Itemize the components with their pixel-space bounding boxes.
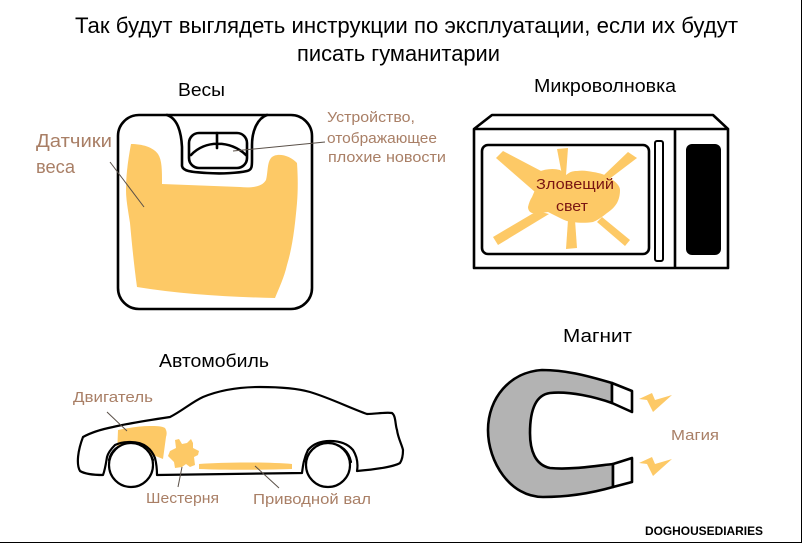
- drive shaft: [199, 462, 292, 470]
- control panel: [686, 144, 721, 255]
- scales body: [118, 115, 312, 309]
- panel: magnet: [488, 326, 719, 497]
- top spark: [639, 393, 672, 412]
- label: weight sensors: веса: [36, 157, 76, 177]
- magnet top pole: [612, 383, 632, 412]
- magnet bottom pole: [613, 458, 632, 487]
- front wheel: [109, 443, 153, 487]
- heading: magnet: Магнит: [563, 326, 632, 346]
- label: sinister light: свет: [556, 199, 588, 215]
- magnet body: [488, 370, 613, 497]
- title: писать гуманитарии: [297, 41, 500, 66]
- bottom spark: [639, 457, 672, 476]
- heading: microwave: Микроволновка: [534, 76, 677, 96]
- label: engine: Двигатель: [73, 389, 153, 406]
- sinister light: [493, 148, 637, 249]
- label: display device: плохие новости: [328, 150, 446, 166]
- microwave body: [474, 115, 728, 268]
- panel: car: [73, 351, 403, 508]
- weight sensors fill: [126, 144, 298, 298]
- title: [75, 13, 738, 66]
- label: sinister light: Зловещий: [536, 177, 614, 193]
- gear: [168, 439, 199, 468]
- label: weight sensors: Датчики: [36, 131, 112, 151]
- heading: scales: Весы: [178, 80, 225, 100]
- heading: car: Автомобиль: [159, 351, 269, 371]
- display: [189, 133, 247, 168]
- leader: weight sensors: [110, 162, 144, 207]
- door handle: [655, 141, 663, 261]
- rear wheel arch: [306, 444, 351, 462]
- label: display device: [327, 110, 446, 166]
- title: Так будут выглядеть инструкции по эксплуатации, если их будут: [75, 13, 738, 38]
- label: drive shaft: Приводной вал: [253, 491, 371, 508]
- display housing: [167, 115, 267, 173]
- rear wheel: [306, 443, 350, 487]
- microwave window: [482, 145, 649, 254]
- panel: scales: [36, 80, 446, 309]
- leaders: [107, 412, 279, 488]
- label: display device: отображающее: [327, 131, 437, 147]
- car outline: [78, 387, 403, 475]
- label: weight sensors: [36, 131, 112, 177]
- label: gear: Шестерня: [146, 490, 219, 507]
- label: magic: Магия: [671, 427, 719, 444]
- leader: display: [233, 142, 325, 151]
- credit: DOGHOUSEDIARIES: [645, 524, 763, 538]
- front wheel arch: [109, 444, 153, 460]
- label: sinister light: [536, 177, 614, 215]
- engine: [117, 426, 167, 459]
- panel: microwave: [474, 76, 728, 268]
- label: display device: Устройство,: [327, 110, 415, 126]
